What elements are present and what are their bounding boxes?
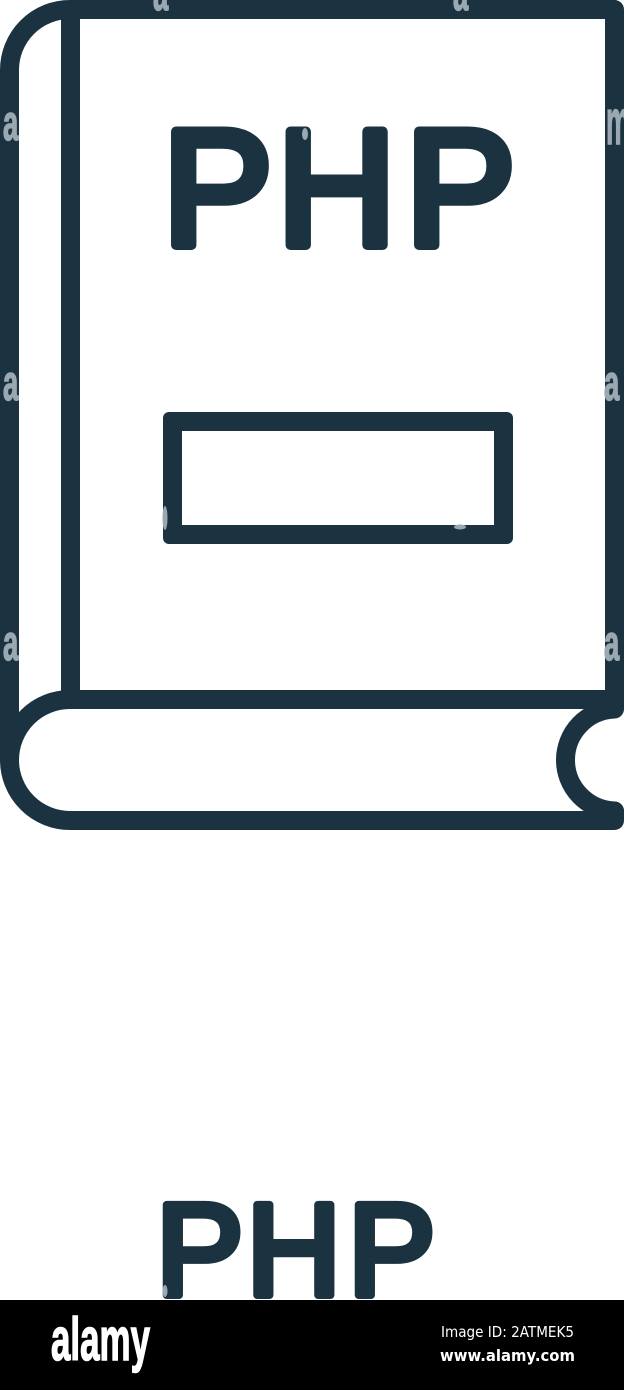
image id: Image ID: 2ATMEK5 (441, 1323, 574, 1341)
book cover outline (10, 10, 614, 820)
book cover title: PHP (162, 96, 516, 280)
watermark fragments: a (3, 614, 19, 671)
icon: PHP book (10, 10, 614, 820)
watermark fragments: a (604, 354, 620, 411)
website: www.alamy.com (440, 1346, 575, 1365)
watermark fragments: a (604, 614, 620, 671)
watermark fragments: a (3, 94, 19, 151)
alamy logo: alamy (51, 1306, 150, 1373)
watermark fragments: a (3, 354, 19, 411)
caption: PHP: PHP (156, 1176, 435, 1323)
footer bar (0, 1300, 624, 1390)
book cover label box (163, 412, 513, 544)
